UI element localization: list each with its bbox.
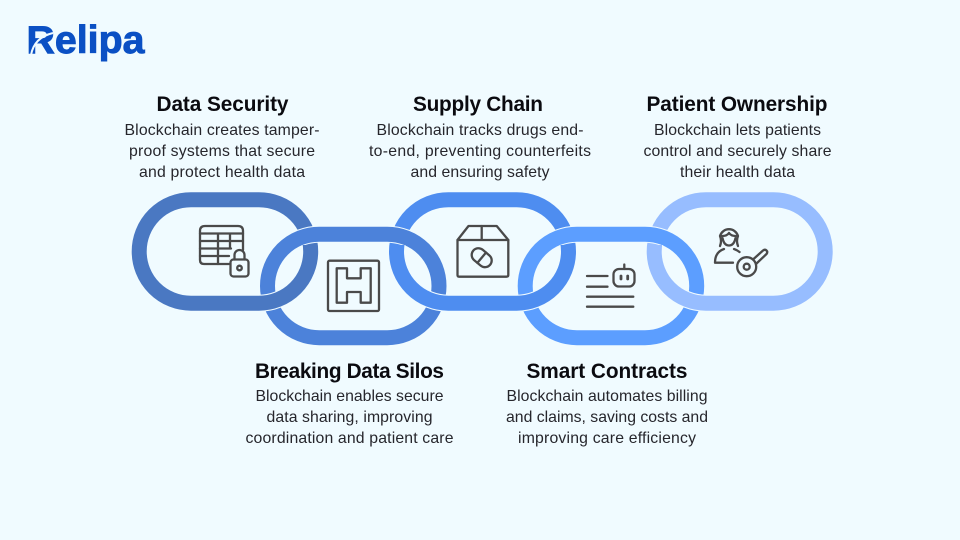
heading block: Data Security [124,93,320,181]
link 4 base [525,234,697,338]
logo: Relipa: Relipa [26,19,145,62]
heading block: Smart Contracts: Smart Contracts [526,360,688,383]
link 4 top overlap [554,226,668,245]
icon: box with pill [458,226,508,277]
heading block: Data Security: proof systems that secure [129,143,315,160]
heading block: Supply Chain: to-end, preventing counterfeits [369,143,591,160]
heading block: Breaking Data Silos: data sharing, improving [266,409,432,426]
heading block: Smart Contracts: Blockchain automates billing [506,388,708,405]
heading block: Patient Ownership: control and securely share [644,143,832,160]
heading block: Supply Chain [369,93,591,181]
chain of five interlocked links [139,200,825,338]
heading block: Breaking Data Silos: coordination and patient care [246,430,454,447]
heading block: Smart Contracts [506,360,708,447]
heading block: Smart Contracts: improving care efficiency [518,430,696,447]
heading block: Patient Ownership: Patient Ownership [646,93,828,116]
link 3 [396,200,568,303]
heading block: Patient Ownership [644,93,832,181]
heading block: Supply Chain: and ensuring safety [410,164,550,181]
heading block: Data Security: Data Security [156,93,289,116]
heading block: Patient Ownership: Blockchain lets patients [654,122,821,139]
icon: hospital H sign [328,261,379,311]
link 2 top overlap [297,226,410,245]
icon: patient with key [715,229,767,276]
heading block: Breaking Data Silos: Blockchain enables secure [256,388,444,405]
heading block: Supply Chain: Blockchain tracks drugs end- [376,122,584,139]
heading block: Supply Chain: Supply Chain [413,93,543,116]
heading block: Breaking Data Silos: Breaking Data Silos [255,360,444,383]
icon: data table with lock [200,226,248,276]
link 1 [139,200,311,303]
heading block: Data Security: Blockchain creates tamper- [124,122,320,139]
link 2 base [268,234,439,338]
heading block: Breaking Data Silos [246,360,454,447]
icon: robot and contract lines [587,264,634,307]
heading block: Patient Ownership: their health data [680,164,795,181]
heading block: Smart Contracts: and claims, saving costs and [506,409,708,426]
heading block: Data Security: and protect health data [139,164,305,181]
link 5 [654,200,825,303]
